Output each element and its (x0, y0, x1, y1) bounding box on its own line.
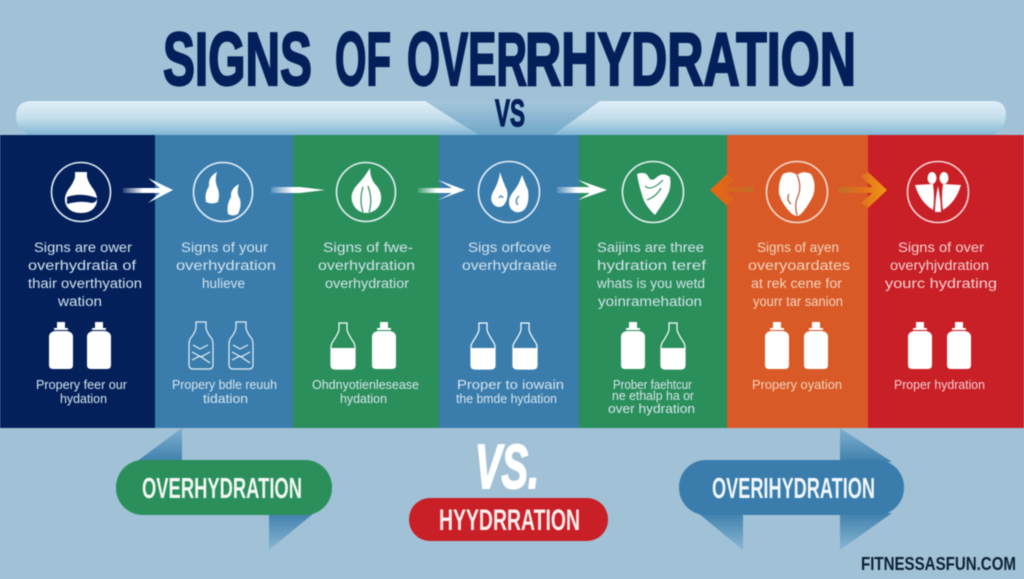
caption text: Proper hydration (894, 378, 985, 392)
caption text: hydation (340, 392, 387, 406)
label: overhydration green pill (116, 460, 332, 515)
panel: column 3 green (293, 135, 439, 428)
description text (885, 240, 997, 291)
ribbon tails: blue pill (698, 428, 892, 550)
description text: overyhjvdration (890, 258, 989, 273)
description text: Sigs orfcove (468, 240, 551, 255)
icon: lungs (908, 162, 968, 222)
description text: yourc hydrating (885, 276, 997, 291)
panel: column 1 navy (0, 135, 155, 428)
arrow: column 1 to 2 (123, 178, 173, 203)
description text: hydration teref (597, 258, 706, 273)
icon: bottles (908, 322, 971, 369)
icon: kidney organ (766, 162, 828, 222)
description text: overyoardates (748, 258, 850, 273)
caption text: hydation (60, 392, 107, 406)
arrow: column 3 to 4 (418, 180, 465, 200)
arrow: orange left (710, 174, 753, 206)
title: OF (335, 17, 391, 101)
heading: VS.: VS. (475, 433, 539, 502)
description text: Signs of fwe- (323, 240, 413, 255)
caption text: over hydration (608, 402, 695, 416)
label: hydration red pill: HYYDRRATION (439, 504, 580, 537)
description text: at rek cene for (751, 276, 843, 291)
label: overhydration blue pill: OVERIHYDRATION (712, 473, 875, 505)
caption text: Propery bdle reuuh (172, 378, 277, 392)
description text: overhydration (176, 258, 276, 273)
description text: thair overthyation (28, 276, 142, 291)
description text: overhydration (318, 258, 415, 273)
icon: heart leaf (622, 162, 684, 222)
caption text: Prober faehtcur (613, 378, 692, 392)
description text: yourr tar sanion (753, 294, 843, 309)
icon: bottles (49, 322, 111, 369)
icon: bottles (765, 322, 828, 369)
panel: column 6 orange (727, 135, 868, 428)
description text (748, 240, 850, 309)
description text: overhydratior (325, 276, 410, 291)
title (163, 17, 856, 101)
description text: overhydraatie (462, 258, 557, 273)
caption text (456, 378, 564, 406)
arrow: column 2 to 3 (271, 187, 325, 193)
description text: overhydratia of (28, 258, 136, 273)
panel: column 4 blue (439, 135, 579, 428)
panel: column 2 blue (155, 135, 293, 428)
icon: half-filled bottles (471, 323, 537, 369)
ribbon tails: green pill (136, 428, 314, 550)
description text: hulieve (202, 276, 245, 291)
icon: bottles (621, 322, 685, 369)
caption text: ne ethalp ha or (612, 389, 694, 403)
description text: Signs are ower (34, 240, 133, 255)
caption text: Propery oyation (752, 378, 842, 392)
caption text (608, 378, 695, 416)
icon: two water drops (478, 162, 540, 222)
arrow: orange right (838, 172, 887, 208)
panel: column 5 green (579, 135, 727, 428)
description text: Signs of over (898, 240, 985, 255)
caption text: Ohdnyotienlesease (312, 378, 419, 392)
caption text (312, 378, 419, 406)
caption text: Propery feer our (36, 378, 127, 392)
description text (28, 240, 142, 309)
icon: half-filled bottles (331, 322, 396, 369)
description text: Signs of ayen (757, 240, 839, 255)
description text (462, 240, 557, 273)
description text: Signs of your (181, 240, 269, 255)
label: hydration red pill (409, 498, 608, 541)
caption text (172, 378, 277, 406)
title: SIGNS (163, 17, 312, 101)
description text (596, 240, 706, 309)
top ribbon banner with VS: VS (495, 93, 525, 135)
panel: column 7 red (868, 135, 1024, 428)
title: RHYDRATION (525, 17, 856, 101)
description text: wation (57, 294, 102, 309)
label: overhydration green pill: OVERHYDRATION (142, 473, 302, 505)
icon: flame (336, 162, 396, 222)
caption text (36, 378, 127, 406)
caption text: the bmde hydation (456, 392, 557, 406)
top ribbon banner with VS (16, 93, 1006, 136)
label: overhydration blue pill (679, 460, 904, 515)
arrow: column 4 to 5 (557, 180, 607, 200)
description text (318, 240, 415, 291)
description text: yoinramehation (598, 294, 702, 309)
icon: two flames (194, 162, 252, 222)
caption text: tidation (203, 392, 248, 406)
title: OVER (407, 17, 527, 101)
description text: Saijins are three (597, 240, 704, 255)
description text: whats is you wetd (596, 276, 705, 291)
icon: outlined bottles (189, 322, 253, 369)
caption text: Proper to iowain (457, 378, 564, 392)
icon: water flask (52, 162, 110, 222)
description text (176, 240, 276, 291)
